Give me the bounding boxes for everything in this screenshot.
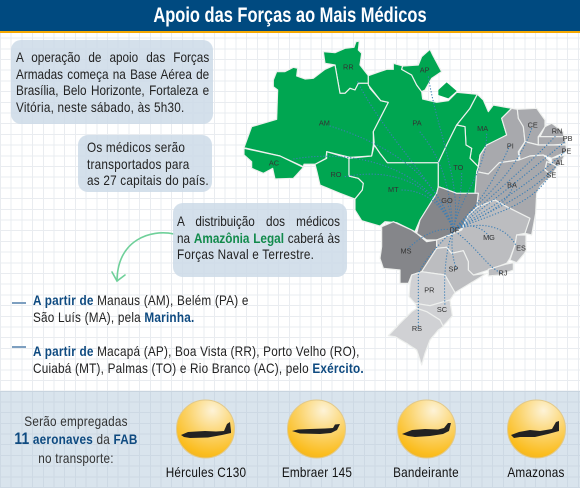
state labels: TO xyxy=(453,163,464,172)
text: aircraft summary xyxy=(14,413,138,466)
state labels: MA xyxy=(477,124,488,133)
text: distribution: Forças Naval e Terrestre. xyxy=(177,246,314,262)
state labels: RS xyxy=(412,324,422,333)
state labels: PB xyxy=(563,134,573,143)
text: aircraft summary: no transporte: xyxy=(38,450,114,466)
text: distribution xyxy=(177,213,340,262)
light grey states: Southeast and South xyxy=(422,200,530,293)
bullet: Exército: Cuiabá (MT), Palmas (TO) e Rio Branco (AC), pelo Exército. xyxy=(33,360,364,376)
state labels: MG xyxy=(483,233,495,242)
state labels: MT xyxy=(388,185,399,194)
text: distribution: na Amazônia Legal caberá às xyxy=(177,230,340,246)
state labels: BA xyxy=(507,180,517,189)
label: Embraer 145: Embraer 145 xyxy=(282,464,352,480)
text: aircraft summary: Serão empregadas xyxy=(24,413,128,429)
panel: distribution xyxy=(173,203,347,277)
state labels xyxy=(269,63,573,333)
text: operation start xyxy=(16,49,209,115)
panel: aircraft xyxy=(0,391,580,488)
panel: operation start xyxy=(11,40,213,124)
state labels: RJ xyxy=(499,268,508,277)
bullet: Marinha: São Luís (MA), pela Marinha. xyxy=(33,309,194,325)
title xyxy=(0,0,580,33)
state labels: PE xyxy=(561,146,571,155)
text: transport: as 27 capitais do país. xyxy=(87,172,209,188)
grey states: Northeast xyxy=(475,108,567,235)
state labels: GO xyxy=(441,196,453,205)
label: Bandeirante: Bandeirante xyxy=(393,464,459,480)
text: transport xyxy=(87,139,209,188)
dotted flight routes xyxy=(292,77,565,330)
text: operation start: Brasília, Belo Horizonte, Fortaleza e xyxy=(16,82,209,98)
bullet: Marinha: A partir de Manaus (AM), Belém (PA) e xyxy=(33,292,249,308)
text: operation start: Armadas começa na Base Aérea de xyxy=(16,66,209,82)
state labels: AP xyxy=(420,66,430,75)
state labels: AC xyxy=(269,159,280,168)
state labels: DF xyxy=(449,225,460,234)
text: operation start: Vitória, neste sábado, às 5h30. xyxy=(16,99,184,115)
state labels: PR xyxy=(424,286,434,295)
green states: Amazônia Legal xyxy=(244,41,512,232)
state labels: SC xyxy=(437,305,448,314)
label: Amazonas: Amazonas xyxy=(507,464,565,480)
icon: Embraer 145 xyxy=(288,400,346,458)
bullet: Exército xyxy=(12,343,364,376)
arrow to list xyxy=(112,233,174,281)
icon: Amazonas xyxy=(508,400,566,458)
state labels: RO xyxy=(330,170,342,179)
state labels: SP xyxy=(448,265,458,274)
state labels: PA xyxy=(412,118,422,127)
text: aircraft summary: 11 aeronaves da FAB xyxy=(14,430,138,448)
state labels: MS xyxy=(400,246,412,255)
state labels: AL xyxy=(556,158,564,167)
icon: Hércules C130 xyxy=(176,400,234,458)
state labels: AM xyxy=(319,118,330,127)
icon: Bandeirante xyxy=(398,400,456,458)
state labels: CE xyxy=(528,121,538,130)
state labels: ES xyxy=(516,244,526,253)
panel: transport xyxy=(78,135,212,192)
state labels: PI xyxy=(507,142,514,151)
dark grey states: Goiás and Mato Grosso do Sul xyxy=(380,187,478,283)
text: operation start: A operação de apoio das Forças xyxy=(16,49,209,65)
text: transport: Os médicos serão xyxy=(87,139,185,155)
bullet: Marinha xyxy=(12,292,249,325)
state labels: RN xyxy=(552,126,562,135)
bullet: Exército: A partir de Macapá (AP), Boa Vista (RR), Porto Velho (RO), xyxy=(33,343,360,359)
text: distribution: A distribuição dos médicos xyxy=(177,213,340,229)
state labels: RR xyxy=(343,63,354,72)
label: Hércules C130: Hércules C130 xyxy=(166,464,246,480)
state labels: SE xyxy=(546,170,556,179)
text: transport: transportados para xyxy=(87,156,190,172)
title: Apoio das Forças ao Mais Médicos xyxy=(153,4,427,27)
